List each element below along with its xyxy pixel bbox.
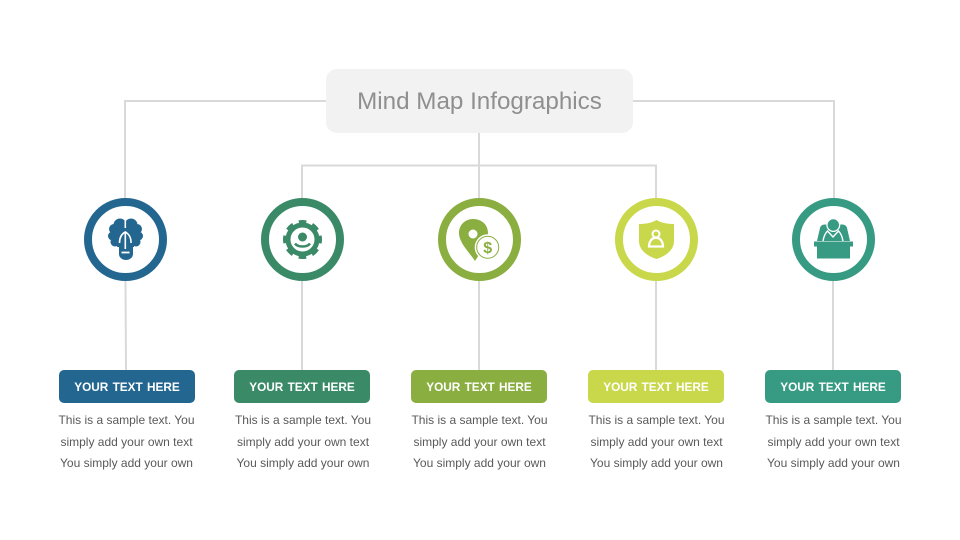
label: column 3 bbox=[411, 370, 547, 403]
label: column 5: YOUR TEXT HERE bbox=[780, 380, 886, 394]
text: column 1: You simply add your own bbox=[60, 456, 193, 470]
icon: location pin with dollar coin bbox=[442, 202, 517, 277]
icon: location pin with dollar coin: $ bbox=[483, 240, 492, 257]
text: column 2: simply add your own text bbox=[237, 435, 369, 449]
label: column 4 bbox=[588, 370, 724, 403]
label: column 5 bbox=[765, 370, 901, 403]
text: column 3: You simply add your own bbox=[413, 456, 546, 470]
text: column 4: This is a sample text. You bbox=[588, 413, 725, 427]
label: column 1: YOUR TEXT HERE bbox=[74, 380, 180, 394]
text: column 2 bbox=[235, 413, 371, 470]
icon: shield with person bbox=[619, 202, 694, 277]
label: column 2 bbox=[234, 370, 370, 403]
label: column 2: YOUR TEXT HERE bbox=[249, 380, 355, 394]
text: column 4: simply add your own text bbox=[590, 435, 723, 449]
text: column 2: This is a sample text. You bbox=[235, 413, 371, 427]
text: column 3 bbox=[411, 413, 548, 470]
text: column 5: This is a sample text. You bbox=[765, 413, 902, 427]
text: column 1 bbox=[58, 413, 195, 470]
text: column 5: simply add your own text bbox=[767, 435, 900, 449]
label: column 1 bbox=[59, 370, 195, 403]
text: column 3: simply add your own text bbox=[413, 435, 546, 449]
title box bbox=[326, 69, 633, 133]
label: column 3: YOUR TEXT HERE bbox=[426, 380, 532, 394]
text: column 3: This is a sample text. You bbox=[411, 413, 548, 427]
text: column 4: You simply add your own bbox=[590, 456, 723, 470]
text: column 5 bbox=[765, 413, 902, 470]
icon: brain lightbulb bbox=[88, 202, 163, 277]
text: column 1: simply add your own text bbox=[60, 435, 193, 449]
title box: Mind Map Infographics bbox=[357, 88, 602, 115]
text: column 5: You simply add your own bbox=[767, 456, 900, 470]
label: column 4: YOUR TEXT HERE bbox=[603, 380, 709, 394]
text: column 2: You simply add your own bbox=[237, 456, 369, 470]
text: column 4 bbox=[588, 413, 725, 470]
icon: speakers at podium bbox=[796, 202, 871, 277]
icon: gear with person bbox=[265, 202, 340, 277]
text: column 1: This is a sample text. You bbox=[58, 413, 195, 427]
